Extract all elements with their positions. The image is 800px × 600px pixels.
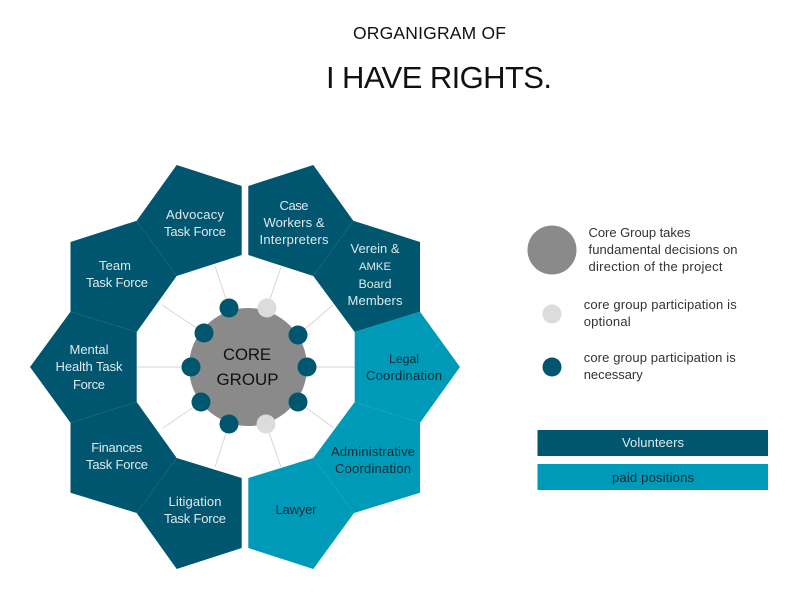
legend bar: paid positions [538,464,768,490]
panel: Litigation Task Force: Litigation [168,494,222,509]
legend bar: volunteers: Volunteers [622,435,684,450]
legend: core group [528,225,738,274]
panel: Legal Coordination: Coordination [366,368,442,383]
panel: Finances Task Force: Task Force [86,457,148,472]
panel: Advocacy Task Force: Task Force [164,224,226,239]
panel: Verein & AMKE Board Members [313,221,420,332]
panel: Verein & AMKE Board Members: Verein & [350,241,400,256]
legend: optional participation: core group participation is [584,297,737,312]
panel: Advocacy Task Force: Advocacy [166,207,224,222]
panel: Administrative Coordination: Administrative [331,444,415,459]
panel: Lawyer [248,458,354,569]
title [326,23,552,95]
connector lines [137,266,355,467]
participation dots [182,298,316,434]
panel: Legal Coordination [355,312,460,423]
panel: Finances Task Force [70,402,177,513]
panel: Mental Health Task Force: Health Task [56,359,123,374]
legend: core group: fundamental decisions on [588,242,738,257]
panel: Verein & AMKE Board Members: Board [358,277,392,291]
panel: Advocacy Task Force [137,165,242,276]
panel: Verein & AMKE Board Members: Members [348,293,403,308]
panel: Finances Task Force: Finances [91,440,143,455]
panel: Mental Health Task Force: Mental [70,342,109,357]
legend: necessary participation: necessary [584,367,643,382]
panel: Administrative Coordination: Coordination [335,461,411,476]
core group circle: CORE [223,345,271,364]
legend: optional participation: optional [584,314,631,329]
legend: core group: Core Group takes [588,225,691,240]
panel: Team Task Force [70,221,177,332]
panel: Case Workers & Interpreters: Workers & [264,215,325,230]
panel: Administrative Coordination [313,402,420,513]
panel: Litigation Task Force [137,458,242,569]
panel: Legal Coordination: Legal [389,352,419,366]
panel: Verein & AMKE Board Members: AMKE [359,261,391,273]
panel: Team Task Force: Task Force [86,275,148,290]
core group circle: GROUP [216,370,278,389]
legend bar: paid positions: paid positions [612,470,694,485]
legend: necessary participation [542,350,736,382]
panel: Mental Health Task Force [30,312,137,423]
legend: optional participation [542,297,737,329]
panel: Case Workers & Interpreters: Case [280,198,308,213]
panel: Mental Health Task Force: Force [73,377,105,392]
panel: Litigation Task Force: Task Force [164,511,226,526]
legend: core group: direction of the project [588,259,723,274]
title: ORGANIGRAM OF [353,23,506,43]
panel: Lawyer: Lawyer [276,502,317,517]
title: I HAVE RIGHTS. [326,60,552,95]
panel: Team Task Force: Team [99,258,131,273]
core group circle [189,308,307,426]
legend: necessary participation: core group participation is [584,350,736,365]
panel: Case Workers & Interpreters: Interpreters [260,232,329,247]
panel: Case Workers & Interpreters [248,165,353,276]
legend bar: volunteers [538,430,768,456]
